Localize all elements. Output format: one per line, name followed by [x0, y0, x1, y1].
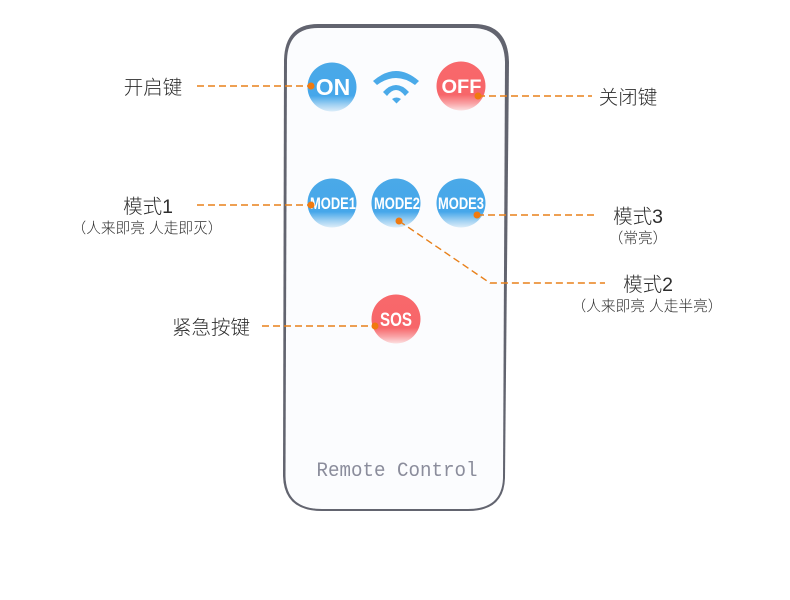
- callout: mode 3: [474, 206, 667, 247]
- callout: mode 1: （人来即亮 人走即灭）: [72, 220, 222, 237]
- callout: SOS key: 紧急按键: [172, 317, 250, 339]
- button: OFF: OFF: [442, 77, 482, 98]
- button: MODE3: [436, 178, 486, 228]
- callout: mode 2: 模式2: [623, 274, 673, 296]
- button: ON: [308, 62, 356, 112]
- callout: ON key: [124, 77, 314, 99]
- callout: mode 3: 模式3: [613, 206, 663, 228]
- button: MODE2: MODE2: [374, 194, 420, 213]
- button: OFF: [436, 62, 486, 110]
- icon: wifi: [373, 71, 419, 104]
- callout: SOS key: [172, 317, 378, 339]
- callout: mode 2: [396, 218, 722, 315]
- callout: OFF key: 关闭键: [599, 87, 657, 109]
- remote control body: [283, 24, 509, 511]
- button: MODE1: [308, 178, 356, 228]
- callout: OFF key: [474, 87, 657, 109]
- remote label: Remote Control: [316, 460, 478, 483]
- button: SOS: SOS: [380, 310, 412, 331]
- callout: ON key: 开启键: [124, 77, 182, 99]
- callout: mode 1: [72, 196, 314, 237]
- callout: mode 2: （人来即亮 人走半亮）: [572, 298, 722, 315]
- button: MODE1: MODE1: [310, 194, 356, 213]
- button: SOS: [372, 294, 420, 344]
- callout: mode 1: 模式1: [123, 196, 173, 218]
- button: MODE2: [372, 178, 420, 228]
- callout: mode 3: （常亮）: [609, 230, 667, 247]
- button: MODE3: MODE3: [438, 194, 484, 213]
- button: ON: ON: [316, 74, 350, 100]
